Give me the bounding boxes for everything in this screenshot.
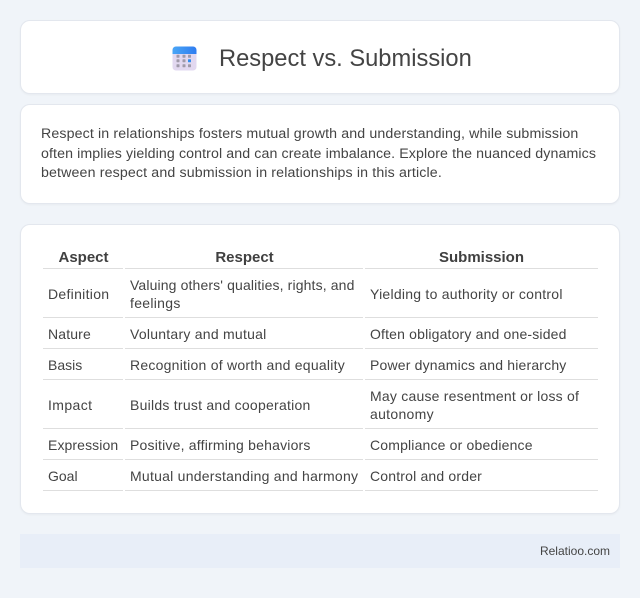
row: Impact — [48, 388, 579, 422]
title: Respect vs. Submission — [219, 46, 472, 72]
intro text: often implies yielding control and can create imbalance. Explore the nuanced dynamics — [41, 146, 596, 162]
row: Definition: Yielding to authority or control — [370, 286, 563, 302]
row: Expression — [48, 437, 533, 453]
row: Definition: Valuing others' qualities, rights, and — [130, 277, 354, 293]
row: Definition — [48, 277, 563, 311]
row: Basis: Recognition of worth and equality — [130, 357, 345, 373]
row: Definition: feelings — [130, 295, 181, 311]
row: Goal: Control and order — [370, 468, 482, 484]
table header: Submission — [439, 249, 524, 266]
intro text: between respect and submission in relationships in this article. — [41, 165, 442, 181]
row: Definition: Definition — [48, 286, 109, 302]
panel: comparison table — [20, 224, 620, 514]
row: Basis — [48, 357, 566, 373]
row: Impact: autonomy — [370, 406, 434, 422]
row: Nature: Often obligatory and one-sided — [370, 326, 567, 342]
panel: title card — [20, 20, 620, 94]
intro text: Respect in relationships fosters mutual growth and understanding, while submission — [41, 126, 578, 142]
row: Impact: May cause resentment or loss of — [370, 388, 579, 404]
row: Nature: Nature — [48, 326, 91, 342]
table header: Aspect — [58, 249, 109, 266]
row: Goal — [48, 468, 482, 484]
table header: Respect — [215, 249, 274, 266]
row: Goal: Goal — [48, 468, 78, 484]
row: Basis: Basis — [48, 357, 82, 373]
row: Nature — [48, 326, 567, 342]
row: Expression: Compliance or obedience — [370, 437, 533, 453]
row: Expression: Expression — [48, 437, 118, 453]
footer bar — [20, 534, 620, 568]
row: Nature: Voluntary and mutual — [130, 326, 267, 342]
row: Expression: Positive, affirming behaviors — [130, 437, 311, 453]
row: Impact: Impact — [48, 397, 92, 413]
rules — [43, 268, 598, 491]
row: Impact: Builds trust and cooperation — [130, 397, 311, 413]
footer credit: Relatioo.com — [540, 544, 610, 558]
panel: introduction — [20, 104, 620, 204]
intro text — [41, 126, 596, 181]
icon: calendar — [172, 46, 196, 70]
row: Basis: Power dynamics and hierarchy — [370, 357, 566, 373]
table header — [58, 249, 524, 266]
row: Goal: Mutual understanding and harmony — [130, 468, 358, 484]
